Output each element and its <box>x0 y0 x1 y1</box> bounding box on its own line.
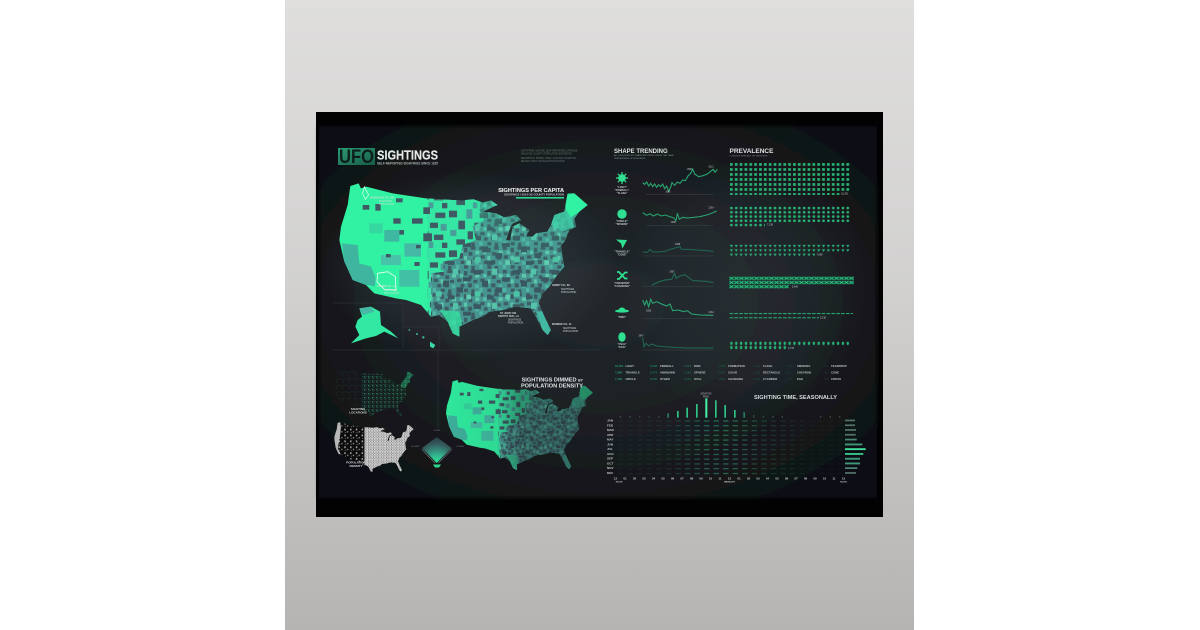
heatmap: month by hour: MAR <box>607 428 615 432</box>
legend: diamond: LOWER <box>456 446 464 448</box>
table: shape counts: 5,540 <box>650 377 657 381</box>
table: shape counts: CYLINDER <box>763 377 777 381</box>
map: sightings dimmed by population density: SIGHTINGS DIMMED BY <box>522 378 584 384</box>
axis: hours of day: 11 <box>832 476 836 480</box>
bar chart: hourly sightings: PEAK <box>703 395 710 398</box>
axis: hours of day: 07 <box>794 476 798 480</box>
icon: circle: "CIRCLE" <box>616 220 629 223</box>
icon: triangle: "CONE" <box>617 254 628 256</box>
table: shape counts: FORMATION <box>728 364 745 368</box>
line chart: circle <box>643 208 717 225</box>
table: shape counts: 7,136 <box>615 377 622 381</box>
line chart: disk: 1955 <box>646 311 652 313</box>
icon: triangle: "TRIANGLE" <box>614 250 630 254</box>
table: shape counts: OTHER <box>660 377 670 381</box>
map: population density <box>333 421 416 473</box>
map: sighting locations <box>334 370 414 418</box>
callouts: county labels: HORRY CO., SC <box>552 284 570 287</box>
axis: hours of day: 04 <box>766 476 769 480</box>
dot chart: circle prevalence <box>729 206 850 227</box>
callouts: county labels: SIGHTINGS <box>508 318 522 322</box>
table: shape counts: RECTANGLE <box>763 370 780 374</box>
dot chart: light prevalence <box>729 162 850 196</box>
panel lines: inset frames <box>333 303 600 428</box>
heatmap: month by hour: JUN <box>607 442 613 446</box>
map: sightings per capita <box>336 180 593 340</box>
table: shape counts: CROSS <box>831 377 841 381</box>
axis: hours of day: 12 <box>614 476 617 480</box>
line chart: triangle <box>643 244 713 256</box>
legend: diamond: MORE <box>434 430 441 432</box>
heatmap: month by hour: JAN <box>607 418 613 422</box>
axis: hours of day: 12 <box>842 476 845 480</box>
heading: shape trending <box>614 149 674 160</box>
line chart: light <box>643 166 717 194</box>
axis: hours of day: 05 <box>661 476 665 480</box>
table: shape counts: SMOKING <box>797 364 810 368</box>
axis: hours of day: NOON <box>840 482 847 484</box>
table: shape counts: 774 <box>787 377 792 381</box>
axis: hours of day: 12 <box>728 476 731 480</box>
table: shape counts: CHANGING <box>728 377 743 381</box>
table: shape counts: 1,708 <box>718 364 725 368</box>
callouts: county labels: OKANOGAN CO., WA <box>370 196 395 200</box>
axis: hours of day: 01 <box>737 476 741 480</box>
callouts: county labels: POPULATION <box>508 322 524 324</box>
table: shape counts: 5,218 <box>684 364 691 368</box>
line chart: oval: 1947 <box>638 336 644 338</box>
heatmap: month by hour: JUL <box>607 447 613 451</box>
map: sightings dimmed by population density <box>444 378 596 472</box>
axis: hours of day: 05 <box>775 476 779 480</box>
callouts: county labels: SIGHTINGS <box>563 327 577 330</box>
callouts: county labels: BAPTIST PAR., LA <box>498 315 519 318</box>
table: shape counts: 3,733 <box>684 377 691 381</box>
icon: unknown shuffle: "CHANGING" <box>614 285 631 288</box>
line chart: unknown: 1997 <box>669 271 675 273</box>
table: shape counts: 1,112 <box>753 377 760 381</box>
map: sighting locations: SIGHTING <box>351 407 366 411</box>
axis: hours of day: 08 <box>690 476 693 480</box>
heatmap: month by hour: MAY <box>607 438 613 442</box>
axis: hours of day: 03 <box>642 476 646 480</box>
dot chart: unknown prevalence <box>729 276 854 289</box>
dot chart: light prevalence: 16,251 <box>841 192 849 196</box>
callouts: county labels: SIGHTINGS <box>384 289 398 292</box>
table: shape counts: SPHERE <box>694 370 706 374</box>
table: shape counts: FIREBALL <box>660 364 674 368</box>
map: Hawaii <box>408 329 435 348</box>
dot chart: oval prevalence <box>729 342 850 350</box>
table: shape counts: LIGHT <box>626 364 634 368</box>
axis: hours of day: 08 <box>804 476 807 480</box>
heading: shape trending: SHAPE TRENDING <box>614 149 668 155</box>
line chart: light: 1985 <box>665 192 671 194</box>
panel: left map terrain glow <box>320 170 620 360</box>
text block: data sources: REPORTING: SHAPE, TIME, LOCATION, DURATION <box>521 157 577 160</box>
dot chart: triangle prevalence: 7,869 <box>816 254 823 256</box>
dot chart: unknown prevalence: 5,640 <box>792 286 799 288</box>
heatmap: month by hour: FEB <box>607 423 614 427</box>
icon: light: "LIGHT" <box>617 186 628 189</box>
icon: oval: "OVAL" <box>617 343 627 346</box>
table: shape counts: 1,654 <box>718 377 725 381</box>
table: shape counts: EGG <box>797 377 803 381</box>
callouts: county labels: YAVAPAI CO., AZ <box>377 285 397 288</box>
table: shape counts: 7,869 <box>615 370 622 374</box>
table: shape counts: FLASH <box>763 364 772 368</box>
heading: prevalence: PREVALENCE <box>730 148 774 155</box>
axis: hours of day: 02 <box>747 476 750 480</box>
table: shape counts: CIRCLE <box>626 377 636 381</box>
line chart: light: 2012 <box>708 166 714 168</box>
map: population density: POPULATION <box>346 460 366 464</box>
text block: data sources: DESIGN: DATA VISUALIZATION POSTER <box>521 160 565 163</box>
axis: hours of day: 04 <box>652 476 655 480</box>
callouts: county labels: POPULATION <box>563 330 579 333</box>
table: shape counts: 349 <box>824 377 829 381</box>
table: shape counts: UNKNOWN <box>660 370 675 374</box>
map: population density: DENSITY <box>349 464 363 468</box>
line chart: disk: 2014 <box>709 312 715 314</box>
map: sighting locations: LOCATIONS <box>349 410 367 414</box>
text block: data sources: ANALYSIS: COUNTY POPULATION ESTIMATES <box>521 152 572 156</box>
dot chart: oval prevalence: 3,733 <box>788 347 795 350</box>
axis: hours of day: 06 <box>785 476 788 480</box>
heading: sighting time seasonally: SIGHTING TIME, SEASONALLY <box>754 395 837 401</box>
callout: Arizona outline <box>377 272 396 290</box>
callouts: county labels <box>370 196 579 333</box>
axis: hours of day: 09 <box>813 476 817 480</box>
table: shape counts: 6,238 <box>650 364 657 368</box>
heatmap: month by hour: OCT <box>607 461 614 465</box>
title: UFO sightings: UFO <box>339 147 374 168</box>
heading: shape trending: PERCENTAGE OF SIGHTINGS <box>614 157 646 160</box>
dot chart: disk prevalence: 5,218 <box>820 316 827 320</box>
axis: hours of day: 09 <box>699 476 703 480</box>
table: shape counts: DISK <box>694 364 701 368</box>
icon: light <box>615 172 630 195</box>
heading: shape trending: ALL SIGHTINGS BY SHAPE REPORTED SINCE THE YEAR <box>614 154 674 157</box>
heading: prevalence: CONSOLE PERCENT OF SIGHTINGS <box>730 156 768 158</box>
line chart: circle: 1995 <box>671 222 677 224</box>
axis: hours of day: 01 <box>623 476 627 480</box>
table: shape counts <box>615 364 847 381</box>
dot chart: triangle prevalence <box>729 244 850 257</box>
table: shape counts: 1,339 <box>753 370 760 374</box>
line chart: disk <box>643 299 715 319</box>
bar chart: hourly sightings <box>620 393 840 418</box>
heatmap: month by hour: NOV <box>607 466 614 470</box>
table: shape counts: CIGAR <box>728 370 737 374</box>
table: shape counts: 1,664 <box>718 370 725 374</box>
table: shape counts: 5,774 <box>650 370 657 374</box>
icon: circle: "SPHERE" <box>616 223 629 226</box>
title: UFO sightings: SELF-REPORTED SIGHTINGS SINCE 1925 <box>377 162 438 166</box>
callouts: county labels: POPULATION <box>561 291 577 294</box>
heatmap: month by hour: DEC <box>607 471 614 475</box>
callouts: county labels: SIGHTINGS <box>561 288 575 291</box>
icon: light: "FLASH" <box>617 192 628 195</box>
icon: oval <box>617 332 627 349</box>
axis: hours of day: 10 <box>709 476 712 480</box>
axis: hours of day: 11 <box>718 476 722 480</box>
axis: hours of day: 10 <box>823 476 826 480</box>
axis: hours of day: 07 <box>680 476 684 480</box>
dot chart: disk prevalence <box>729 312 853 320</box>
table: shape counts: 464 <box>824 370 829 374</box>
axis: hours of day: 02 <box>633 476 636 480</box>
callouts: county labels: ST. JOHN THE <box>500 312 517 315</box>
dot chart: circle prevalence: 7,136 <box>767 224 774 226</box>
axis: hours of day: 06 <box>671 476 674 480</box>
heading: sightings per capita: SIGHTINGS PER CAPITA <box>498 188 564 194</box>
heatmap: month by hour <box>607 420 829 474</box>
heatmap: month by hour: SEP <box>607 457 613 461</box>
poster <box>316 112 883 517</box>
text block: data sources <box>521 150 578 163</box>
text block: data sources: DATA FROM: NUFORC SELF-REPORTED DATABASE <box>521 150 578 152</box>
axis: hours of day: NOON <box>616 482 623 484</box>
icon: unknown shuffle: "UNKNOWN" <box>614 282 631 285</box>
axis: hours of day <box>614 476 847 484</box>
line chart: oval <box>638 336 713 350</box>
icon: triangle <box>614 240 630 256</box>
callout: Washington outline <box>363 187 369 199</box>
icon: oval: "EGG" <box>618 346 627 349</box>
heatmap: month by hour: AUG <box>607 452 614 456</box>
panel: right column texture glow <box>620 160 870 420</box>
table: shape counts: 1,117 <box>787 364 794 368</box>
heatmap: month by hour: APR <box>607 433 614 437</box>
table: shape counts: CHEVRON <box>797 370 811 374</box>
title: UFO sightings: SIGHTINGS <box>377 148 438 162</box>
table: shape counts: CONE <box>831 370 839 374</box>
axis: hours of day: 03 <box>756 476 760 480</box>
table: shape counts: 16,251 <box>615 364 624 368</box>
bar chart: hourly sightings: SIGHTING <box>700 393 712 395</box>
table: shape counts: TEARDROP <box>831 364 847 368</box>
line chart: light: 1999 <box>687 169 693 171</box>
map: Alaska <box>351 307 398 343</box>
legend: diamond <box>411 430 464 468</box>
table: shape counts: TRIANGLE <box>626 370 640 374</box>
icon: disk <box>615 308 629 319</box>
legend: diamond: HIGHER <box>411 446 420 448</box>
heading: sightings per capita: SIGHTINGS / 2014 US COUNTY POPULATION <box>504 192 564 196</box>
callouts: county labels: POPULATION <box>384 292 400 295</box>
line chart: circle: 2014 <box>709 208 715 210</box>
table: shape counts: 711 <box>824 364 829 368</box>
axis: hours of day: MIDNIGHT <box>724 482 736 484</box>
table: shape counts: 1,551 <box>753 364 760 368</box>
icon: circle <box>616 209 629 226</box>
table: shape counts: 921 <box>787 370 792 374</box>
map: sightings dimmed by population density: POPULATION DENSITY <box>521 384 583 390</box>
callouts: county labels: POPULATION <box>379 203 395 206</box>
icon: light: "FIREBALL" <box>615 189 630 192</box>
line chart: triangle: 1998 <box>675 244 681 246</box>
table: shape counts: 5,104 <box>684 370 691 374</box>
heading: sightings per capita <box>498 188 564 199</box>
icon: unknown shuffle <box>614 272 631 288</box>
callouts: county labels: SIGHTINGS <box>379 200 393 203</box>
callouts: county labels: MONROE CO., FL <box>552 323 572 326</box>
title: UFO sightings <box>338 147 438 168</box>
bar chart: monthly totals <box>845 420 866 474</box>
table: shape counts: OVAL <box>694 377 702 381</box>
icon: disk: "DISK" <box>618 316 627 319</box>
line chart: unknown <box>643 271 713 287</box>
